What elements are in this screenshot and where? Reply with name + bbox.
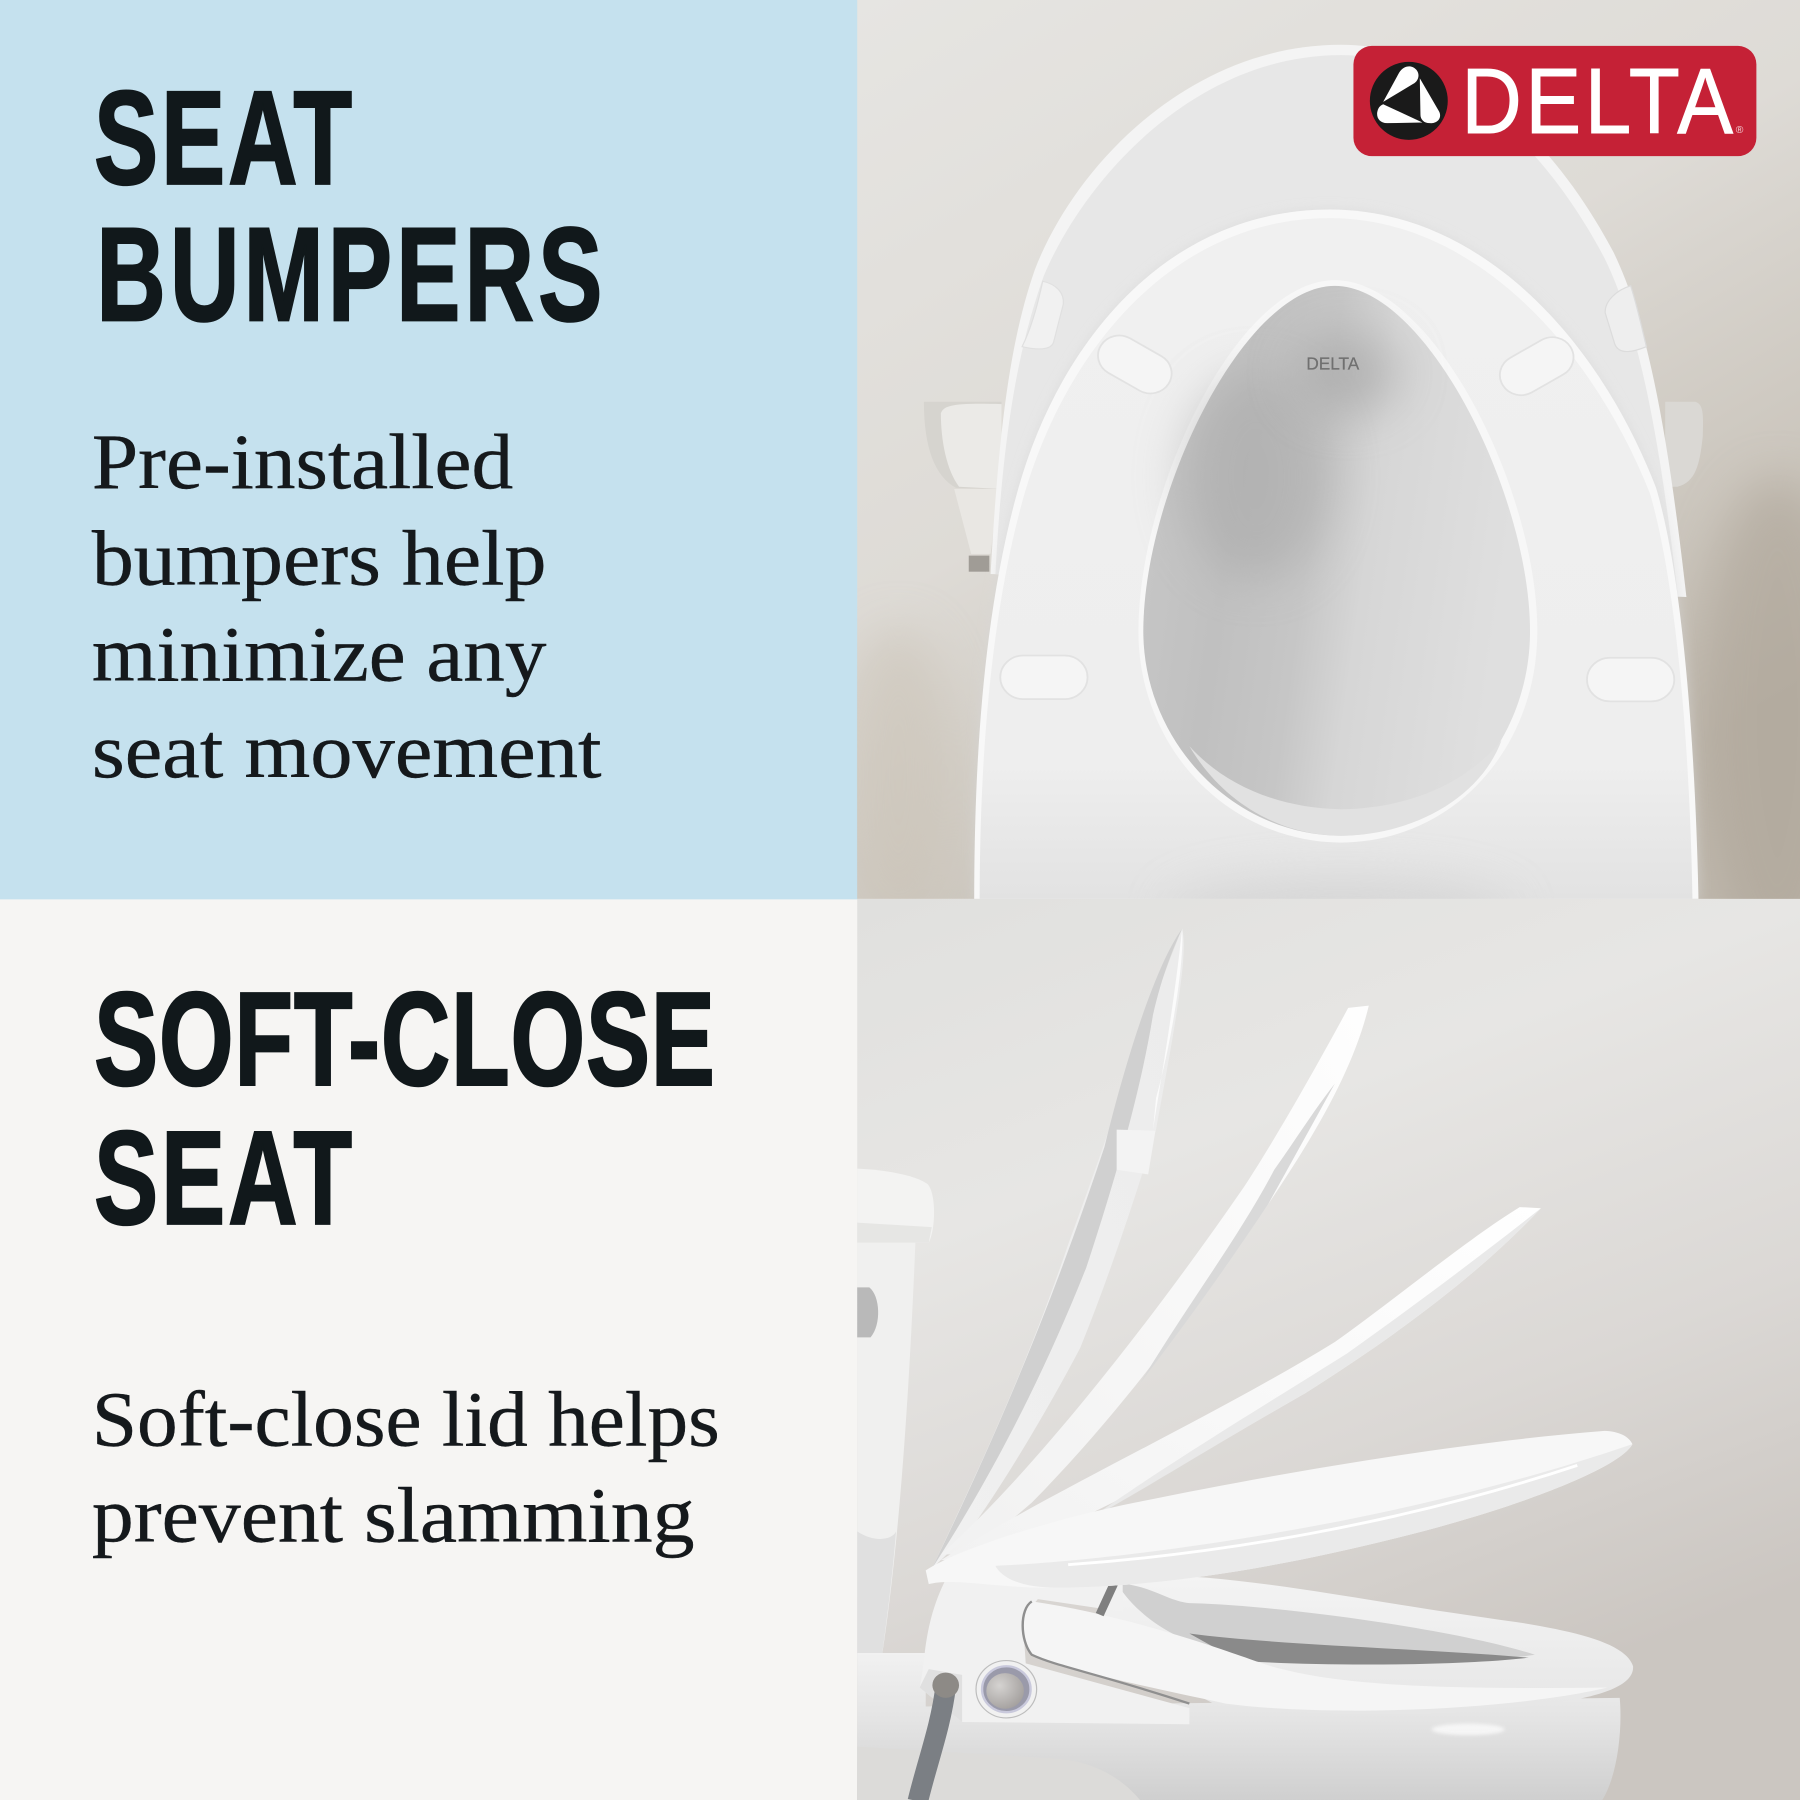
panel: soft-close text [0,899,858,1800]
heading: seat bumpers: BUMPERS [96,200,602,349]
lid bumper left [1022,281,1063,349]
icon: delta triangle mark [1370,62,1448,140]
lid position 3 [941,1207,1541,1560]
bumper lower right [1587,658,1674,701]
text block: bumpers description: bumpers help [92,514,546,601]
lid underside [991,45,1686,597]
text block: soft-close description: Soft-close lid helps [92,1375,720,1462]
tank left [924,402,1703,572]
photo: soft-close lid sequence [857,899,1800,1800]
seat opening [1138,280,1537,843]
seat opening logo text: DELTA [1306,354,1360,374]
heading: soft-close seat [94,964,715,1252]
control knob [976,1661,1037,1718]
lid position 4 [926,1431,1632,1588]
hinge housing [920,1577,1608,1724]
lid position 2 [941,1006,1369,1554]
panel: seat bumpers text [0,0,858,899]
pivot rod [1096,1586,1118,1616]
text block: soft-close description: prevent slamming [92,1472,695,1559]
heading: soft-close seat: SOFT-CLOSE [94,964,715,1114]
text block: bumpers description: Pre-installed [92,418,513,505]
bumper lower left [1000,655,1088,699]
seat ring [1104,1577,1633,1703]
heading: seat bumpers: SEAT [94,63,352,212]
flush handle [857,1287,878,1337]
text block: soft-close description [92,1375,720,1559]
lid bumper right [1605,286,1646,352]
bumper upper left [1097,334,1172,394]
heading: soft-close seat: SEAT [94,1103,352,1252]
lid position 1 [932,929,1184,1569]
hose [918,1686,946,1800]
text block: bumpers description: minimize any [92,611,546,698]
text block: bumpers description [92,418,602,794]
text block: bumpers description: seat movement [92,707,602,794]
badge: Delta logo [1353,46,1756,156]
wordmark: DELTA [1461,49,1733,153]
bowl and deck [857,1653,1620,1800]
tank [857,1169,934,1659]
photo: toilet seat underside with bumpers [844,0,1800,959]
bumper upper right [1499,336,1574,396]
seat [974,210,1699,947]
registered mark: ® [1736,125,1744,136]
heading: seat bumpers [94,63,602,349]
